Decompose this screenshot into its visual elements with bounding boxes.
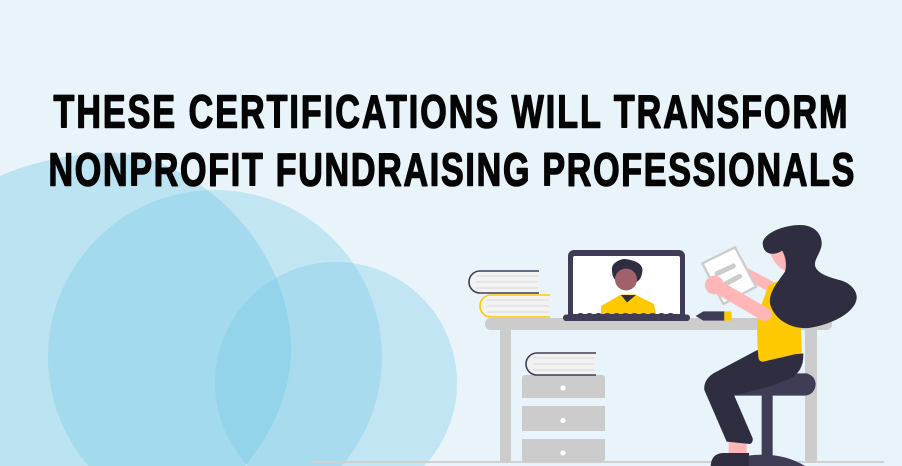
floor line [311,461,884,463]
pen [696,311,732,321]
paper [702,247,756,304]
face [771,249,787,272]
caller body [601,294,656,314]
title: NONPROFIT FUNDRAISING PROFESSIONALS [48,143,854,196]
laptop base [563,313,690,321]
woman reading paper on stool [702,225,857,466]
drawers [522,375,605,462]
caller collar [621,295,636,302]
book: top of stack [469,271,539,293]
front arm and hand [705,276,765,314]
stool [733,373,816,466]
trousers [704,350,803,444]
hair [763,225,857,328]
caller hair [612,259,642,282]
laptop with video call [563,250,690,321]
shirt [757,281,802,362]
back arm [747,274,774,288]
desk [485,318,832,463]
title [48,85,854,196]
book: yellow [480,295,550,317]
ankle [729,440,747,455]
book: on drawers [526,353,596,375]
shoe [711,453,749,466]
title: THESE CERTIFICATIONS WILL TRANSFORM [54,85,848,138]
caller face [615,268,637,290]
decorative overlapping circles [0,153,457,466]
